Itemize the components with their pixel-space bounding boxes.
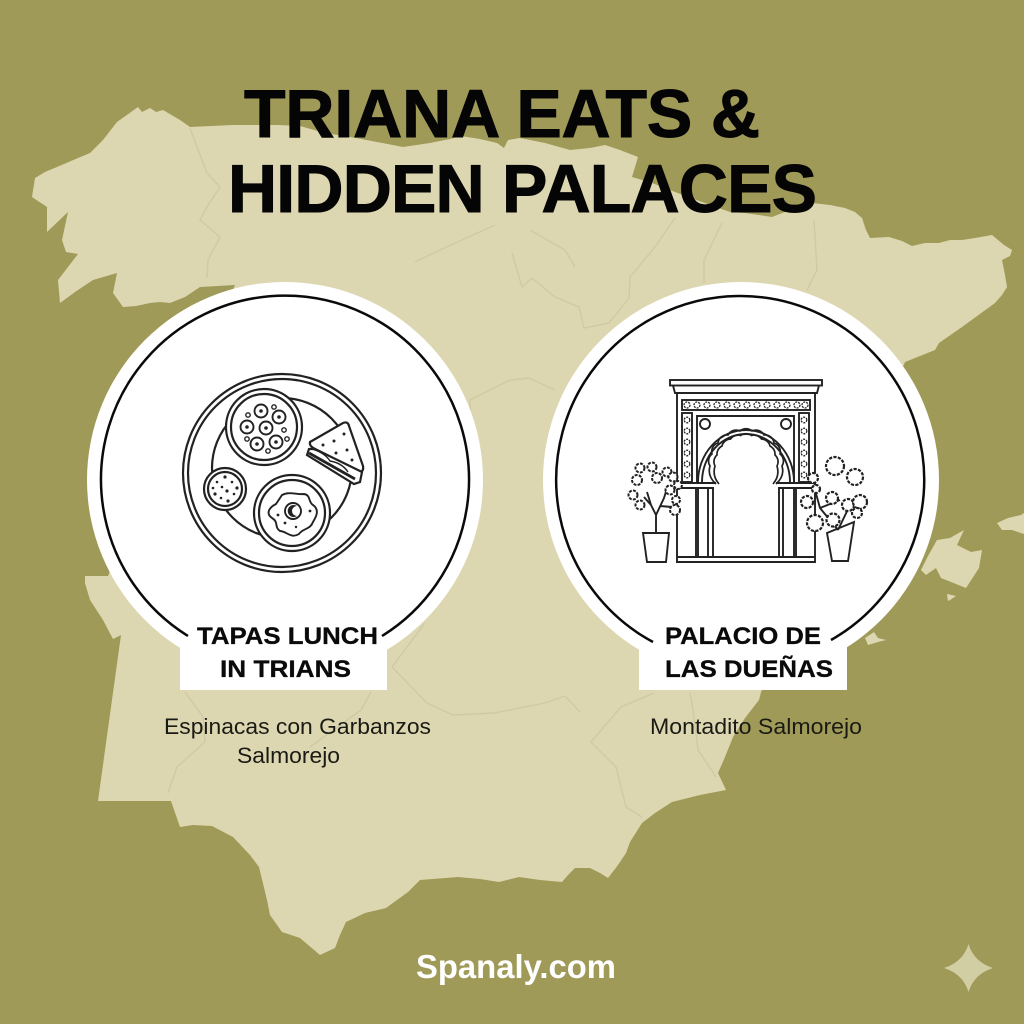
panel: tapas lunch <box>87 282 483 690</box>
icon: tapas plate <box>183 374 381 572</box>
text block: tapas dishes: Espinacas con Garbanzos <box>164 714 431 739</box>
icon: right potted plant <box>801 457 867 561</box>
label: palacio de las duenas <box>665 623 833 683</box>
title: TRIANA EATS & <box>244 76 760 152</box>
title: HIDDEN PALACES <box>228 151 817 227</box>
text block: palacio dish: Montadito Salmorejo <box>650 714 862 739</box>
title <box>228 76 817 227</box>
label: tapas lunch: TAPAS LUNCH <box>197 623 378 650</box>
icon: moorish arch with potted plants <box>628 380 867 562</box>
label: palacio de las duenas: PALACIO DE <box>665 623 821 650</box>
brand footer: Spanaly.com <box>416 948 616 985</box>
label: palacio de las duenas: LAS DUEÑAS <box>665 655 833 683</box>
label: tapas lunch: IN TRIANS <box>220 656 351 683</box>
text block: tapas dishes: Salmorejo <box>237 743 340 768</box>
panel: palacio de las duenas <box>543 282 939 690</box>
icon: left potted plant <box>628 462 682 562</box>
icon: sparkle star <box>944 944 993 992</box>
text block: tapas dishes <box>164 714 431 768</box>
label: tapas lunch <box>197 623 378 683</box>
